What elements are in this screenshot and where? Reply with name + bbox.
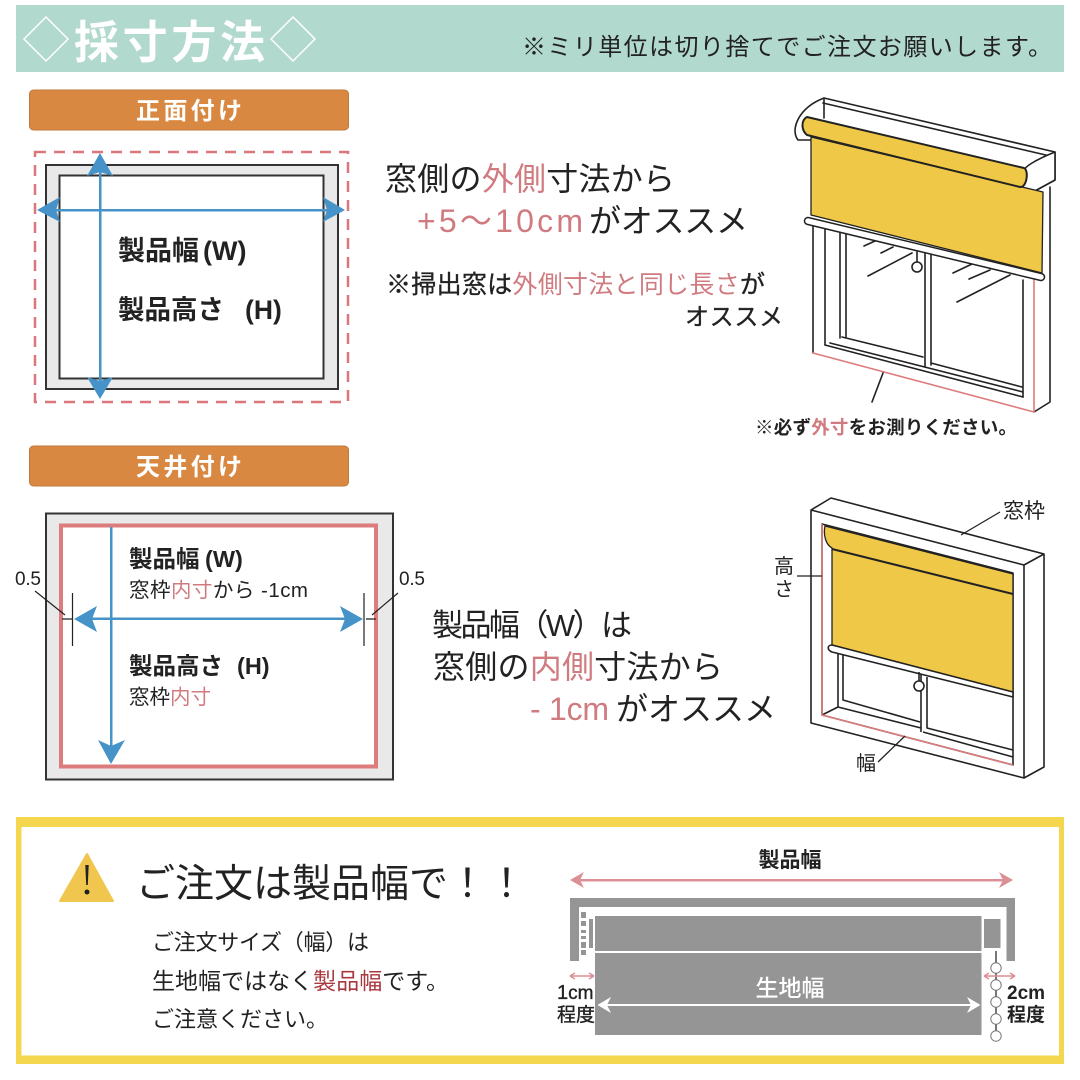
label: inner size minus one: 窓枠内寸から -1cm [129,579,308,602]
leader lines [797,512,1000,762]
label: product width: 製品幅 [129,546,200,572]
label: 0.5 right [364,569,425,646]
text block: order explanation: ご注文サイズ（幅）は [152,930,369,955]
text block: sweep window note: オススメ [685,304,783,331]
arrow: product width [570,872,1013,888]
label: product width: (W) [205,546,243,572]
window frame [813,187,1050,412]
label: product height: 製品高さ [129,653,223,679]
bottom bar [808,221,1041,277]
label: height: さ [774,579,794,601]
text block: front mount recommendation: がオススメ [589,203,748,239]
bead chain [991,951,1001,1041]
text block: order explanation [152,930,449,1032]
bottom bar [828,645,1013,697]
text block: front mount recommendation: +5〜10cm [417,203,583,239]
text block: ceiling mount recommendation: 窓側の内側寸法から [433,649,723,685]
text block: order explanation: 生地幅ではなく製品幅です。 [152,968,449,994]
label: inner size: 窓枠内寸 [129,686,211,709]
fabric [811,137,1043,273]
roller [802,117,1027,187]
heading: ceiling mount [30,446,348,486]
label: window frame: 窓枠 [1003,500,1045,523]
icon: warning [60,854,113,901]
valance [795,98,1055,192]
label: 1cm margin [557,982,595,1026]
diagram: product width versus fabric width [557,849,1045,1041]
heading: order by product width: ご注文は製品幅で！！ [136,863,526,906]
label: 1cm margin: 程度 [557,1004,595,1026]
heading: front mount: 正面付け [136,98,242,125]
panel: order note [16,817,1064,1064]
label: width: 幅 [856,752,876,775]
label: product height: 製品高さ [118,295,224,325]
label: 0.5 left [15,569,72,646]
label: 1cm margin: 1cm [557,982,593,1004]
fabric top [595,916,982,951]
pull cord [914,681,924,691]
window frame [811,498,1044,778]
illustration: ceiling mounted blind [797,498,1044,778]
header note: ※ミリ単位は切り捨てでご注文お願いします。 [522,34,1052,61]
label: 2cm margin: 程度 [1007,1004,1045,1026]
header band [16,5,1064,72]
label: product height: (H) [245,295,282,325]
label: fabric width: 生地幅 [756,975,824,1001]
mechanism [581,912,1000,955]
arrow: left margin [570,973,594,979]
label: 2cm margin: 2cm [1007,983,1045,1004]
text block: sweep window note: ※掃出窓は外側寸法と同じ長さが [386,271,765,299]
text block: ceiling mount recommendation: - 1cm [530,691,609,727]
heading: ceiling mount: 天井付け [136,454,242,481]
label: 0.5 right: 0.5 [399,569,425,590]
text block: front mount recommendation [385,161,748,239]
title: 採寸方法 [74,17,265,68]
label: product height: (H) [237,653,270,679]
label: product width: 製品幅 [758,849,822,872]
text block: ceiling mount recommendation: がオススメ [616,691,776,727]
title [24,17,315,68]
note: measure the outer size: ※必ず外寸をお測りください。 [755,417,1017,438]
label: 2cm margin [1007,983,1045,1026]
diagram: front mount measurement [35,152,348,402]
fabric bottom [595,953,982,1035]
arrow: width [74,606,363,632]
text block: ceiling mount recommendation [432,608,776,727]
arrow: right margin [984,973,1015,979]
cassette bracket [570,898,1015,961]
fabric [824,526,1013,692]
diagram: ceiling mount measurement [15,514,425,780]
text block: order explanation: ご注意ください。 [152,1007,328,1032]
text block: front mount recommendation: 窓側の外側寸法から [385,161,675,197]
arrow: height [98,527,125,764]
text block: ceiling mount recommendation: 製品幅（W）は [432,608,632,643]
label: product width: 製品幅(W) [118,236,246,266]
heading: front mount [30,90,348,130]
text block: sweep window note [386,271,783,331]
label: 0.5 left: 0.5 [15,569,41,590]
arrow: height [87,153,113,399]
illustration: front mounted blind [795,98,1055,412]
arrow: width [37,197,345,222]
label: height: 高 [774,556,794,578]
arrow: fabric width [598,997,980,1013]
